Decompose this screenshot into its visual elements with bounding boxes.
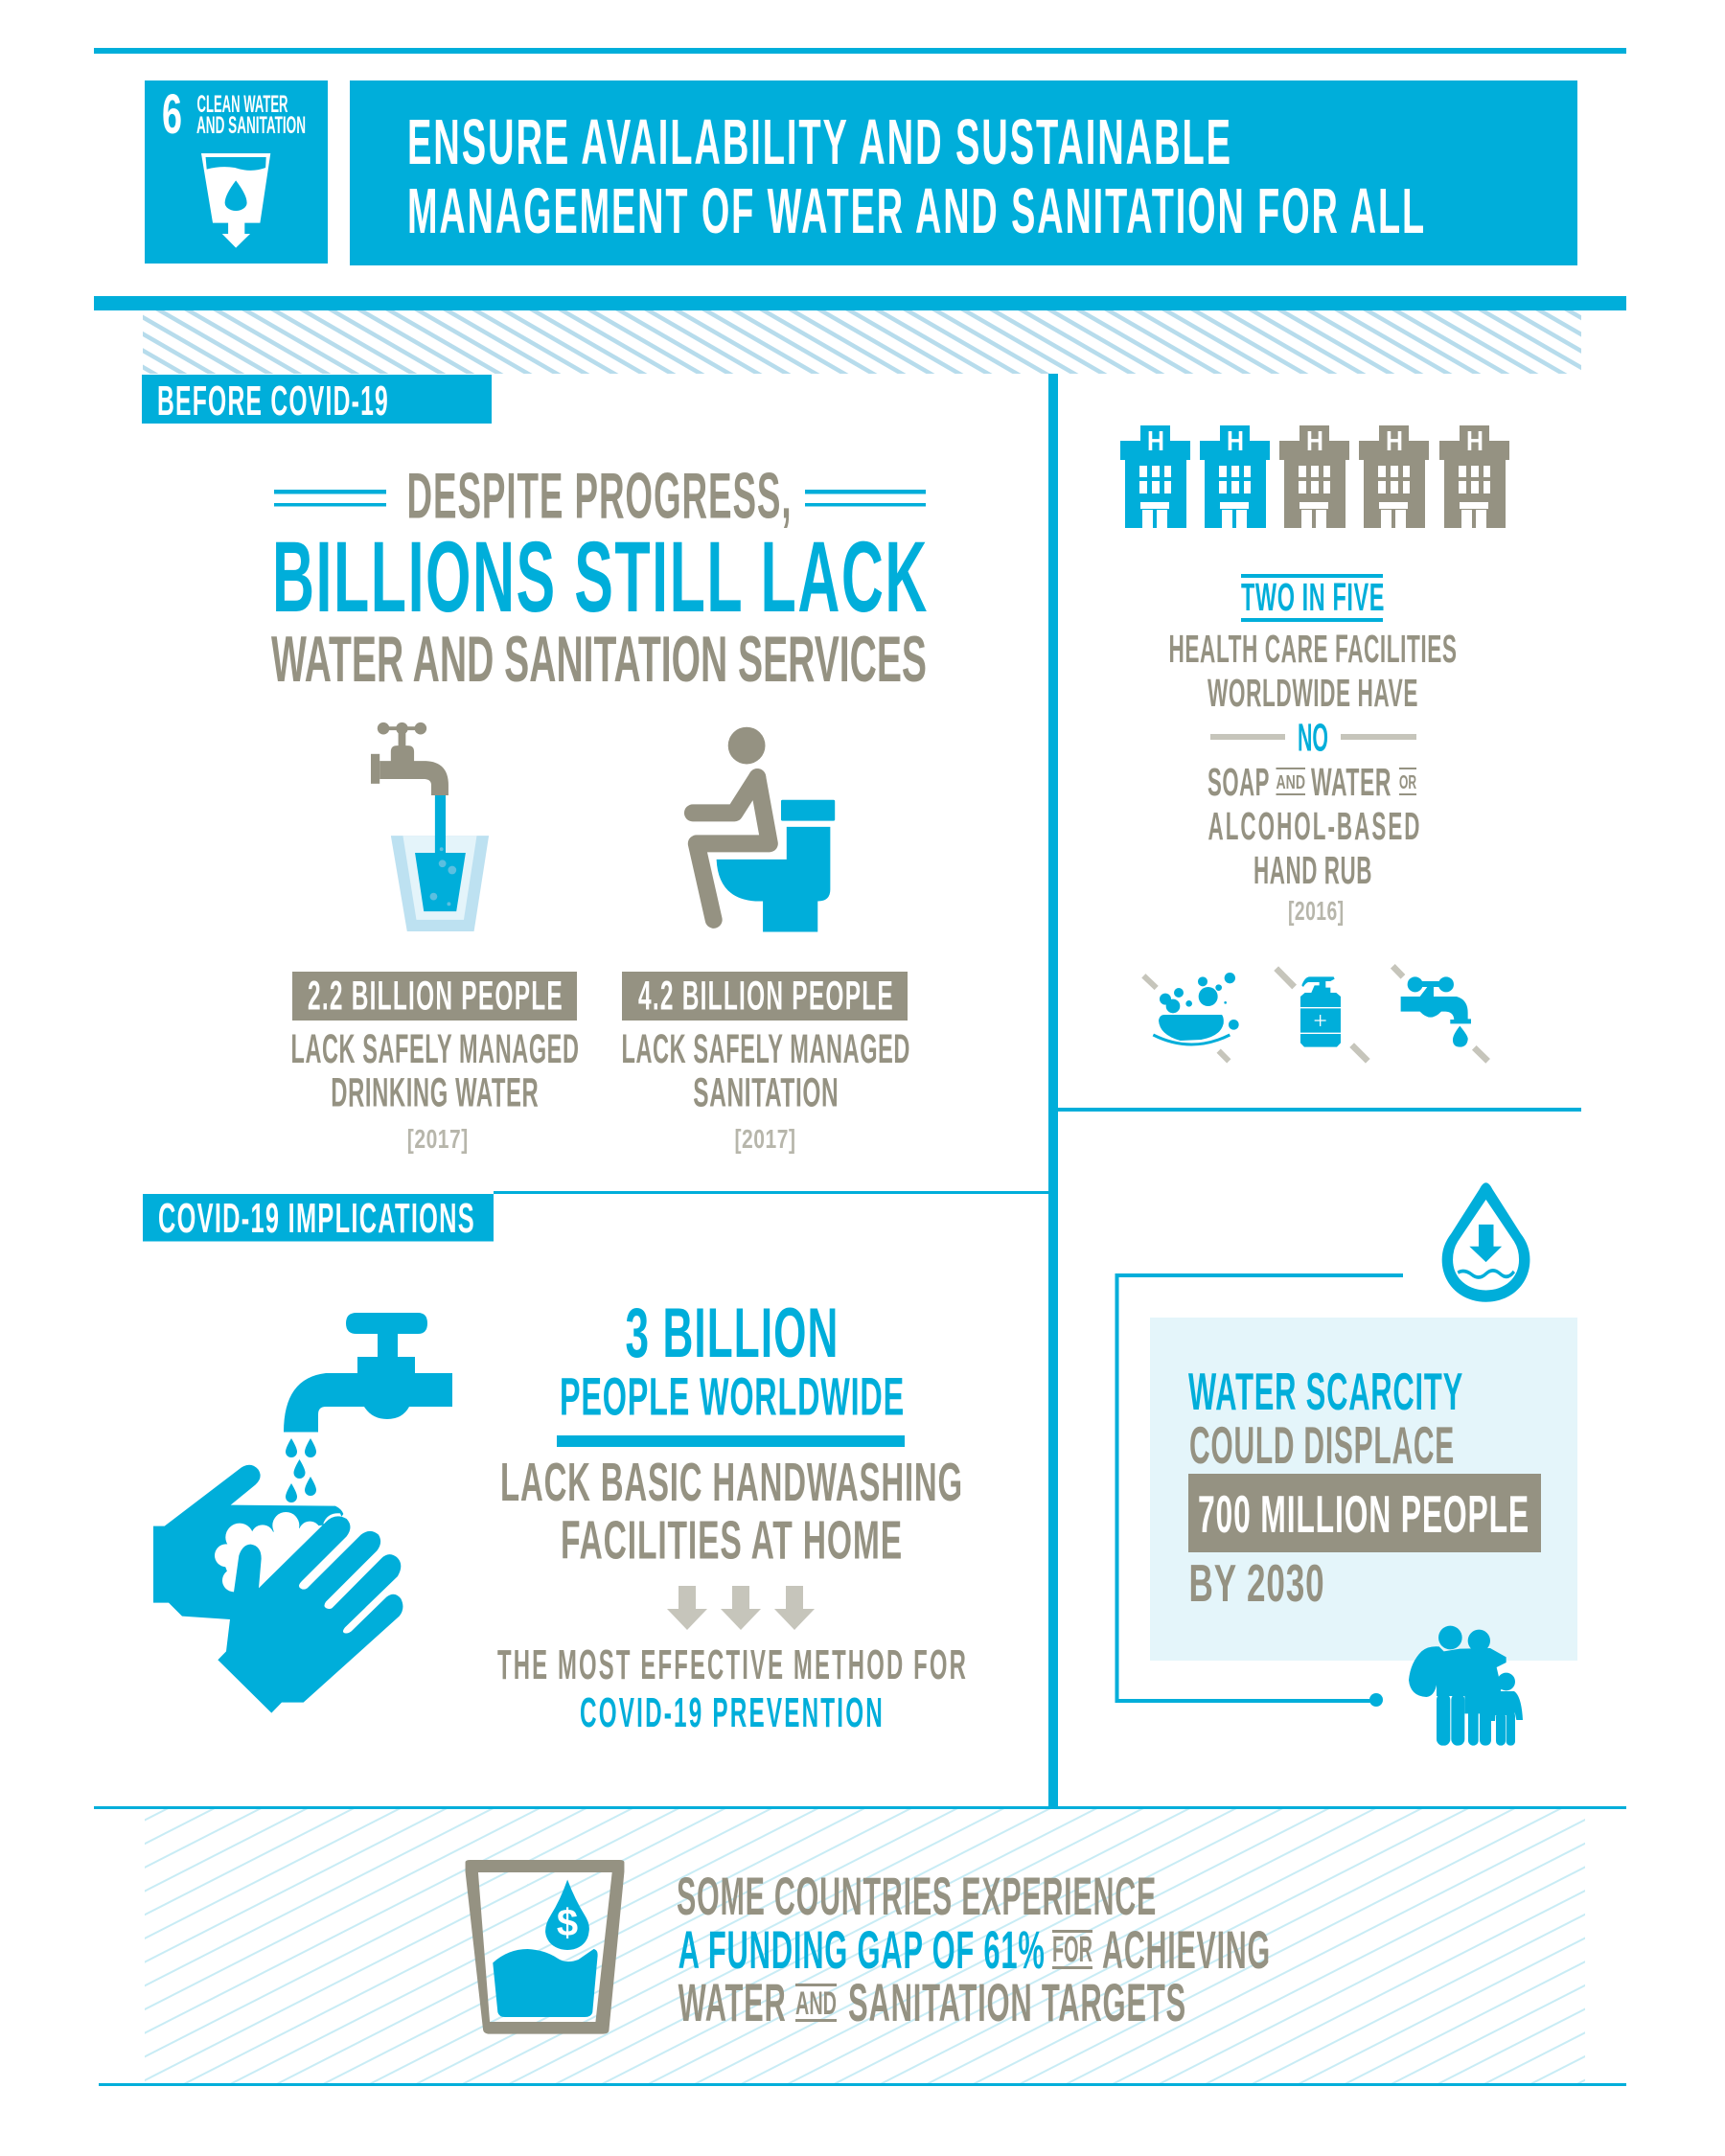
icon: tap filling glass	[371, 722, 489, 931]
heading: billions still lack: BILLIONS STILL LACK	[272, 521, 929, 633]
text: most effective method: COVID-19 PREVENTION	[580, 1689, 885, 1736]
panel: goal banner	[350, 80, 1577, 265]
stat: sanitation: [2017]	[734, 1124, 795, 1154]
icon row: five hospitals: H	[1386, 426, 1403, 457]
icon: tap over washing hands	[153, 1313, 452, 1713]
panel: funding gap	[94, 1806, 1626, 2086]
icon: water drop level	[1442, 1182, 1530, 1302]
badge number: 6	[162, 83, 182, 146]
stat: drinking water: 2.2 BILLION PEOPLE	[308, 973, 564, 1019]
stat: sanitation: 4.2 BILLION PEOPLE	[638, 973, 894, 1019]
text: funding gap: AND	[795, 1985, 837, 2022]
section tag: before COVID-19: BEFORE COVID-19	[157, 378, 389, 424]
panel: water scarcity	[1117, 1182, 1577, 1746]
text: water scarcity: BY 2030	[1188, 1553, 1324, 1613]
text: two in five: WATER	[1311, 760, 1392, 804]
stat: drinking water: DRINKING WATER	[331, 1070, 539, 1116]
text: two in five: OR	[1399, 772, 1416, 793]
icon: displaced family	[1409, 1626, 1523, 1746]
text: two in five: ALCOHOL-BASED	[1208, 804, 1422, 848]
text: 3 billion people: LACK BASIC HANDWASHING	[500, 1452, 963, 1513]
text: two in five: SOAP	[1208, 760, 1270, 804]
bracket line with dot	[1117, 1275, 1403, 1707]
stat: drinking water: LACK SAFELY MANAGED	[291, 1026, 579, 1072]
text: funding gap: FOR	[1052, 1930, 1092, 1970]
heading: billions still lack	[271, 460, 929, 696]
stat: sanitation: SANITATION	[693, 1070, 839, 1116]
stat: drinking water: [2017]	[407, 1124, 469, 1154]
icon row: five hospitals: H	[1306, 426, 1323, 457]
arrows: three pointing down	[667, 1586, 815, 1630]
text: funding gap	[677, 1866, 1271, 2032]
panel: health care facilities	[1120, 425, 1509, 1061]
icon: person on toilet	[693, 727, 835, 931]
text: two in five: [2016]	[1288, 896, 1345, 926]
badge title: CLEAN WATER	[197, 91, 288, 118]
panel: before COVID-19	[142, 375, 929, 1154]
icon row: five hospitals: H	[1466, 426, 1484, 457]
text: funding gap: SOME COUNTRIES EXPERIENCE	[677, 1866, 1157, 1926]
callout background	[1150, 1318, 1577, 1661]
text: most effective method	[497, 1641, 968, 1736]
text: funding gap: A FUNDING GAP OF 61%	[678, 1919, 1046, 1980]
text: two in five: NO	[1298, 716, 1328, 760]
text: water scarcity	[1188, 1362, 1541, 1613]
icon row: five hospitals	[1120, 425, 1509, 528]
text: funding gap: WATER	[678, 1972, 787, 2032]
stat: drinking water	[291, 972, 579, 1154]
text: 3 billion people: PEOPLE WORLDWIDE	[560, 1366, 905, 1426]
text: two in five: HEALTH CARE FACILITIES	[1169, 627, 1457, 671]
text: water scarcity: COULD DISPLACE	[1189, 1415, 1455, 1475]
text: most effective method: THE MOST EFFECTIVE METHOD FOR	[497, 1641, 968, 1688]
section tag: COVID-19 implications: COVID-19 IMPLICATIONS	[158, 1195, 475, 1242]
badge title: AND SANITATION	[196, 112, 306, 139]
icon: crossed-out soap	[1143, 973, 1239, 1061]
text: 3 billion people	[500, 1295, 963, 1571]
text: two in five	[1169, 574, 1457, 926]
panel: COVID-19 implications	[143, 1194, 968, 1736]
heading: billions still lack: DESPITE PROGRESS,	[406, 460, 792, 533]
text: 3 billion people: 3 BILLION	[625, 1295, 840, 1372]
badge title	[196, 91, 306, 139]
text: funding gap: ACHIEVING	[1102, 1919, 1271, 1980]
icon: glass with drop and arrow	[201, 153, 270, 248]
icon: crossed-out tap	[1392, 966, 1488, 1061]
icon: glass with dollar drop: $	[557, 1902, 578, 1944]
icon row: five hospitals: H	[1147, 426, 1164, 457]
text: two in five: TWO IN FIVE	[1241, 575, 1385, 619]
stat: sanitation: LACK SAFELY MANAGED	[621, 1026, 910, 1072]
banner heading	[407, 106, 1426, 247]
icon: glass with dollar drop	[466, 1860, 624, 2034]
heading: billions still lack: WATER AND SANITATION SERVICES	[271, 623, 927, 696]
text: two in five: HAND RUB	[1254, 848, 1372, 892]
icon row: five hospitals: H	[1227, 426, 1244, 457]
panel: SDG 6 badge	[145, 80, 328, 264]
text: two in five: WORLDWIDE HAVE	[1208, 671, 1418, 715]
icon: crossed-out hand rub	[1276, 969, 1368, 1061]
text: funding gap: SANITATION TARGETS	[848, 1972, 1186, 2032]
stat: sanitation	[621, 972, 910, 1154]
text: water scarcity: WATER SCARCITY	[1188, 1362, 1463, 1421]
text: 3 billion people: FACILITIES AT HOME	[561, 1510, 903, 1571]
section tag: COVID-19 implications	[143, 1194, 494, 1242]
text: two in five: AND	[1276, 772, 1305, 793]
